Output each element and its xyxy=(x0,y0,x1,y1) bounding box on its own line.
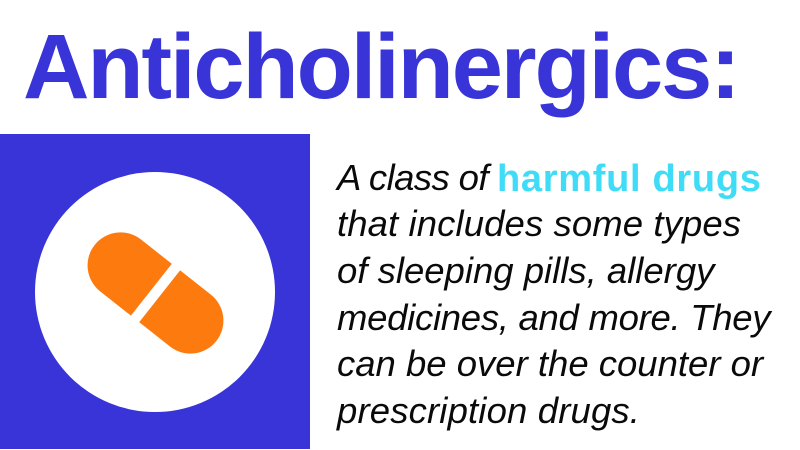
text block: definition: that includes some types xyxy=(337,203,741,244)
icon: orange pill xyxy=(71,214,240,372)
text block: definition: prescription drugs. xyxy=(337,390,640,431)
text block: definition: harmful drugs xyxy=(497,158,762,200)
panel: pill icon xyxy=(0,134,310,449)
title: Anticholinergics: xyxy=(23,16,739,118)
text block: definition: of sleeping pills, allergy xyxy=(337,250,714,291)
text block: definition: A class of xyxy=(337,157,488,198)
text block: definition xyxy=(335,157,772,431)
text block: definition: can be over the counter or xyxy=(337,343,763,384)
text block: definition: medicines, and more. They xyxy=(337,297,770,338)
